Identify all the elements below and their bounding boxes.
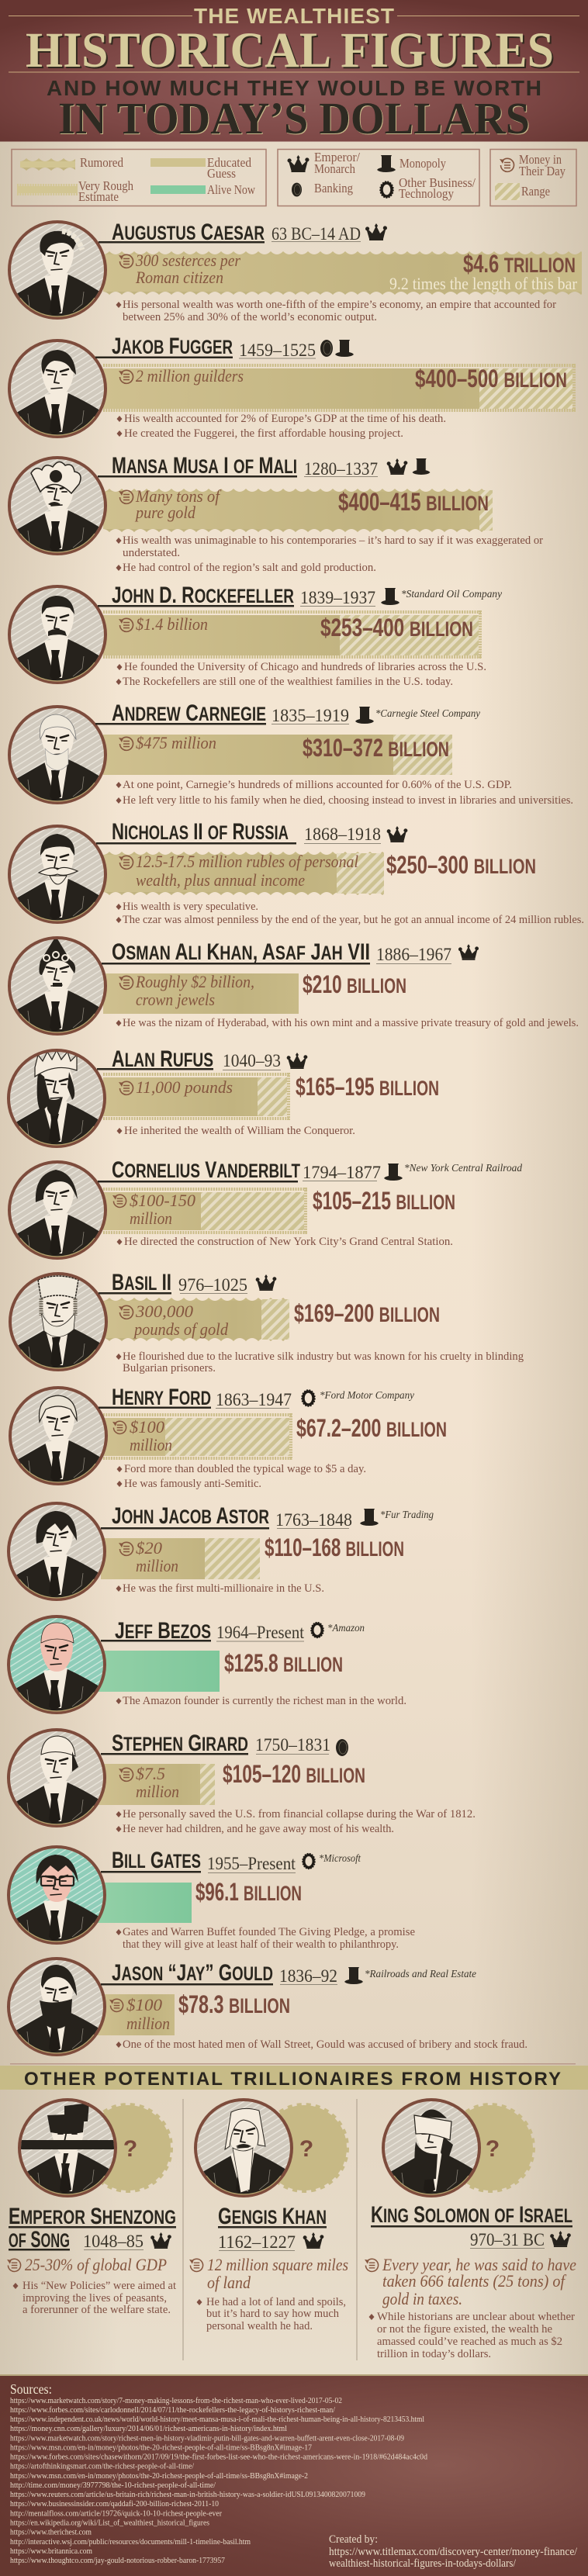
facts (116, 413, 446, 440)
entry: Augustus Caesar (9, 220, 582, 323)
wealth bar (101, 1538, 260, 1579)
icon: monopoly (355, 707, 374, 724)
portrait (9, 341, 105, 440)
facts (116, 901, 584, 926)
dates: 63 BC–14 AD (272, 224, 361, 244)
money then: taken 666 talents (25 tons) of (382, 2271, 567, 2291)
name: NICHOLAS II OF RUSSIA (112, 819, 289, 845)
icon: emperor crown (365, 223, 387, 240)
legend: wealth source icons: Banking (314, 181, 353, 195)
dates: 1048–85 (83, 2232, 144, 2251)
credits: Created by: (329, 2533, 378, 2546)
legend: wealth source icons: Technology (399, 186, 454, 201)
sources list: https://en.wikipedia.org/wiki/List_of_wealthiest_historical_figures (10, 2518, 209, 2527)
facts: While historians are unclear about whether (377, 2311, 575, 2323)
money then: million (130, 1208, 172, 1228)
facts: but it’s hard to say how much (206, 2308, 339, 2320)
icon: banking (336, 1739, 348, 1756)
money then: million (136, 1556, 178, 1575)
entry: Alan Rufus (9, 1046, 439, 1150)
dates: 1794–1877 (303, 1163, 381, 1182)
entry: Henry Ford (10, 1385, 447, 1490)
amount: $96.1 BILLION (195, 1878, 302, 1906)
wealth bar (103, 1413, 292, 1460)
sources list: https://www.reuters.com/article/us-britain-rich/richest-man-in-british-history-was-a-soldier-idUSL0913400820071009 (10, 2490, 365, 2499)
money then (112, 1191, 195, 1228)
money then: $100 (126, 1995, 162, 2014)
facts: His personal wealth was worth one-fifth of the empire’s economy, an empire that accounted for (123, 299, 556, 311)
dates: 1839–1937 (300, 588, 375, 607)
icons: crown and monopoly (387, 458, 430, 475)
unknown wealth seal: ? (123, 2136, 137, 2162)
portrait (9, 1616, 105, 1716)
amount: $67.2–200 BILLION (296, 1414, 447, 1442)
dates: 1955–Present (207, 1854, 296, 1873)
title line 3: AND HOW MUCH THEY WOULD BE WORTH (47, 76, 541, 100)
icon: crown (303, 2232, 323, 2249)
legend: estimate types (12, 149, 266, 206)
company note: *Microsoft (319, 1853, 361, 1865)
name: EMPEROR SHENZONG (9, 2204, 176, 2229)
facts (116, 1463, 366, 1490)
portrait (18, 2100, 117, 2199)
money then: Roughly $2 billion, (135, 972, 254, 991)
portrait (9, 1503, 105, 1603)
dates: 1750–1831 (255, 1735, 330, 1755)
wealth bar (97, 1994, 175, 2035)
legend: estimate types: Very Rough (78, 178, 133, 193)
amount: $78.3 BILLION (178, 1990, 290, 2018)
money then: $475 million (136, 733, 216, 752)
money then: crown jewels (136, 990, 215, 1009)
legend: estimate types: Rumored (80, 155, 123, 170)
company note: *New York Central Railroad (404, 1163, 523, 1174)
dates: 1836–92 (279, 1966, 337, 1986)
wealth bar (103, 1298, 289, 1341)
legend: estimate types: Educated (207, 155, 251, 170)
column dividers (183, 2099, 357, 2360)
unknown wealth seal: ? (299, 2136, 313, 2162)
panel: King Solomon of Israel (365, 2100, 576, 2360)
sources list: https://www.forbes.com/sites/carlodonnell/2014/07/11/the-rockefellers-the-legacy-of-historys-richest-man/ (10, 2405, 336, 2415)
dates: 1868–1918 (304, 825, 381, 844)
unknown wealth seal (261, 2105, 348, 2190)
facts (116, 1350, 524, 1374)
facts (116, 534, 543, 574)
legend: money and range (490, 149, 576, 206)
sources list: https://www.msn.com/en-in/money/photos/the-20-richest-people-of-all-time/ss-BBsg8nX#image-17 (10, 2443, 312, 2453)
icon: crown (287, 1053, 307, 1069)
entry: Cornelius Vanderbilt (9, 1157, 523, 1261)
money then (189, 2255, 348, 2292)
sources list: http://mentalfloss.com/article/19726/quick-10-10-richest-people-ever (10, 2509, 222, 2518)
portrait (9, 826, 105, 925)
legend: money and range: Range (521, 184, 550, 199)
wealth bar (103, 1073, 290, 1120)
section heading band: OTHER POTENTIAL TRILLIONAIRES FROM HISTORY (24, 2069, 561, 2090)
money then: $1.4 billion (136, 614, 208, 634)
icon: other business (302, 1390, 315, 1406)
facts: His wealth was unimaginable to his contemporaries – it’s hard to say if it was exaggerated or (123, 534, 543, 547)
amount: $250–300 BILLION (386, 851, 536, 879)
dates: 1763–1848 (275, 1510, 352, 1530)
sources list: https://www.msn.com/en-in/money/photos/the-20-richest-people-of-all-time/ss-BBsg8nX#image-2 (10, 2471, 308, 2481)
title line 2: HISTORICAL FIGURES (26, 22, 554, 78)
name: GENGIS KHAN (218, 2204, 327, 2229)
facts (369, 2311, 575, 2360)
entry: Nicholas II of Russia (9, 819, 584, 926)
portrait (9, 707, 105, 806)
facts: He flourished due to the lucrative silk industry but was known for his cruelty in blinding (123, 1350, 524, 1363)
money then: $20 (136, 1538, 162, 1558)
name: ALAN RUFUS (112, 1046, 213, 1072)
facts: Ford more than doubled the typical wage to $5 a day. (124, 1463, 366, 1475)
name: BASIL II (112, 1270, 171, 1295)
legend: estimate types: Estimate (78, 189, 119, 204)
facts: His wealth is very speculative. (123, 901, 258, 913)
title line 2: HISTORICAL FIGURES (27, 24, 555, 80)
name: STEPHEN GIRARD (112, 1731, 248, 1756)
sources list: https://www.thoughtco.com/jay-gould-notorious-robber-baron-1773957 (10, 2556, 225, 2565)
legend: wealth source icons (278, 149, 479, 206)
money then: million (136, 1782, 179, 1801)
portrait (9, 222, 105, 321)
wealth bar (103, 1188, 307, 1234)
money then: $7.5 (136, 1764, 165, 1783)
icon: monopoly (381, 588, 399, 605)
legend: wealth source icons: Emperor/ (314, 150, 360, 164)
icon: crown (256, 1274, 276, 1291)
portrait (9, 1847, 105, 1946)
facts: He created the Fuggerei, the first affordable housing project. (124, 427, 403, 440)
sources list: https://www.marketwatch.com/story/7-money-making-lessons-from-the-richest-man-who-ever-lived-2017-05-02 (10, 2396, 342, 2405)
money then: 12 million square miles (207, 2255, 348, 2274)
icon: crown (458, 944, 479, 960)
wealth bar (103, 610, 482, 659)
title line 4: IN TODAY’S DOLLARS (59, 94, 531, 144)
legend: wealth source icons: Other Business/ (399, 175, 476, 190)
company note: *Amazon (327, 1623, 365, 1634)
entry: Andrew Carnegie (9, 700, 573, 807)
facts: He was the first multi-millionaire in the U.S. (123, 1582, 324, 1595)
facts: The Amazon founder is currently the richest man in the world. (123, 1695, 406, 1707)
dates: 1964–Present (216, 1623, 305, 1642)
facts: or not the figure existed, the wealth he (377, 2323, 552, 2336)
facts: He inherited the wealth of William the Conqueror. (124, 1125, 355, 1137)
portrait (10, 1274, 106, 1373)
money then: of land (207, 2273, 251, 2292)
unknown wealth seal (447, 2105, 534, 2190)
portrait (9, 1050, 105, 1150)
sources list: https://www.forbes.com/sites/chasewithorn/2017/09/19/the-first-forbes-list-see-who-the-richest-americans-were-in-1918/#62d484ac4c0d (10, 2453, 427, 2462)
portrait (9, 458, 105, 557)
dates: 1886–1967 (376, 945, 451, 964)
portrait (10, 1388, 106, 1487)
dates: 1863–1947 (216, 1390, 292, 1409)
facts (116, 661, 486, 688)
panel: Emperor Shenzong of Song (7, 2100, 177, 2316)
icon: crown (550, 2231, 571, 2247)
sources list: Sources: (10, 2381, 52, 2397)
panel: Gengis Khan (189, 2100, 348, 2332)
company note: *Railroads and Real Estate (365, 1969, 476, 1980)
name: BILL GATES (112, 1848, 201, 1873)
dates: 1459–1525 (239, 341, 316, 360)
legend: money and range: Money in (519, 152, 562, 167)
legend: wealth source icons: Monopoly (399, 156, 446, 171)
facts: He never had children, and he gave away most of his wealth. (123, 1823, 394, 1835)
sources list: https://www.independent.co.uk/news/world/world-history/meet-mansa-musa-i-of-mali-the-richest-human-being-in-all-history-8213453.html (10, 2415, 424, 2424)
facts: understated. (123, 547, 180, 559)
entry: John D. Rockefeller (9, 583, 503, 688)
sources list: https://www.marketwatch.com/story/richest-men-in-history-vladimir-putin-bill-gates-and-warren-buffett-arent-even-close-2017-08-09 (10, 2434, 404, 2443)
name: HENRY FORD (112, 1385, 211, 1410)
facts: He founded the University of Chicago and hundreds of libraries across the U.S. (124, 661, 486, 673)
amount: $310–372 BILLION (303, 734, 449, 762)
name: JOHN D. ROCKEFELLER (112, 583, 294, 608)
money then: million (130, 1435, 172, 1454)
dates: 1835–1919 (272, 706, 349, 725)
legend: estimate types: Alive Now (207, 182, 256, 197)
facts: that they will give at least half of their wealth to philanthropy. (123, 1938, 399, 1951)
title line 4: IN TODAY’S DOLLARS (58, 93, 530, 143)
dates: 970–31 BC (470, 2230, 545, 2249)
facts: One of the most hated men of Wall Street, Gould was accused of bribery and stock fraud. (123, 2038, 527, 2051)
entry: Jason Jay Gould (9, 1959, 527, 2058)
name: OF SONG (9, 2227, 70, 2253)
facts: Gates and Warren Buffet founded The Giving Pledge, a promise (123, 1926, 415, 1938)
amount: $210 BILLION (303, 970, 406, 998)
wealth bar (97, 1883, 192, 1923)
facts: His wealth accounted for 2% of Europe’s GDP at the time of his death. (124, 413, 446, 425)
portrait (9, 1959, 105, 2058)
money then: 300 sesterces per (135, 251, 240, 270)
dates: 1162–1227 (218, 2232, 296, 2252)
entry: Jeff Bezos (9, 1616, 406, 1716)
sources list (10, 2381, 427, 2565)
amount: $253–400 BILLION (320, 614, 473, 641)
money then (109, 1995, 170, 2033)
sources list: https://www.therichest.com (10, 2527, 92, 2536)
name (9, 2204, 176, 2253)
money then (119, 1302, 229, 1339)
name: KING SOLOMON OF ISRAEL (371, 2202, 572, 2228)
facts (116, 779, 573, 807)
icon: monopoly (360, 1509, 379, 1526)
money then (119, 1538, 178, 1575)
money then (119, 251, 240, 287)
money then: 11,000 pounds (136, 1077, 233, 1097)
name: JOHN JACOB ASTOR (112, 1503, 269, 1529)
dates: 1280–1337 (304, 459, 378, 479)
wealth bar (97, 1651, 220, 1692)
facts (116, 1808, 476, 1835)
entry: Osman Ali Khan, Asaf Jah VII (9, 936, 579, 1037)
facts: His “New Policies” were aimed at (22, 2280, 177, 2292)
facts: between 25% and 30% of the world’s economic output. (123, 311, 377, 323)
money then (119, 1764, 179, 1801)
facts: He directed the construction of New York City’s Grand Central Station. (124, 1236, 453, 1248)
money then: $100-150 (130, 1191, 195, 1210)
legend: wealth source icons: Monarch (314, 161, 355, 176)
title line 1: THE WEALTHIEST (194, 4, 394, 28)
name: JAKOB FUGGER (112, 334, 233, 359)
entry: Bill Gates (9, 1847, 415, 1951)
money then: pure gold (134, 503, 196, 522)
facts: He had a lot of land and spoils, (206, 2296, 346, 2308)
icon: crown (387, 826, 407, 842)
money then: wealth, plus annual income (136, 870, 305, 890)
facts: He left very little to his family when he died, choosing instead to invest in libraries and universities. (123, 794, 573, 807)
dates: 976–1025 (178, 1275, 247, 1295)
company note: *Fur Trading (380, 1509, 434, 1521)
money then: gold in taxes. (382, 2289, 462, 2308)
facts (116, 1926, 415, 1951)
sources list: https://artofthinkingsmart.com/the-richest-people-of-all-time/ (10, 2462, 195, 2471)
money then (365, 2255, 576, 2308)
facts: improving the lives of peasants, (22, 2292, 167, 2305)
portrait (9, 1162, 105, 1261)
amount: $400–415 BILLION (338, 488, 489, 516)
sources list: https://www.businessinsider.com/qaddafi-200-billion-richest-2011-10 (10, 2499, 219, 2509)
wealth bar (103, 852, 384, 895)
entry: Jakob Fugger (9, 334, 576, 440)
icon: monopoly (344, 1967, 363, 1984)
portrait (9, 1730, 105, 1829)
facts: At one point, Carnegie’s hundreds of millions accounted for 0.60% of the U.S. GDP. (123, 779, 512, 791)
facts: amassed could’ve reached as much as $2 (377, 2336, 562, 2348)
portrait (9, 936, 105, 1037)
facts: trillion in today’s dollars. (377, 2348, 491, 2360)
name: CORNELIUS VANDERBILT (112, 1157, 300, 1183)
money then (119, 852, 358, 890)
facts: He had control of the region’s salt and gold production. (123, 562, 376, 574)
header banner (0, 0, 588, 144)
money then: $100 (130, 1417, 164, 1437)
money then: Many tons of (135, 486, 222, 506)
amount: $105–215 BILLION (313, 1187, 455, 1215)
name: OSMAN ALI KHAN, ASAF JAH VII (112, 939, 370, 965)
wealth bar (103, 735, 452, 775)
sources list: http://time.com/money/3977798/the-10-richest-people-of-all-time/ (10, 2481, 216, 2490)
facts: He personally saved the U.S. from financial collapse during the War of 1812. (123, 1808, 476, 1820)
unknown wealth seal: ? (486, 2136, 500, 2162)
facts: a forerunner of the welfare state. (22, 2304, 171, 2316)
wealth bar (97, 1764, 215, 1805)
portrait (383, 2100, 479, 2199)
icon: crown (150, 2232, 171, 2249)
legend: estimate types: Guess (207, 166, 236, 181)
entry: John Jacob Astor (9, 1503, 434, 1603)
company note: *Ford Motor Company (320, 1390, 415, 1402)
facts (116, 299, 556, 323)
facts: He was the nizam of Hyderabad, with his own mint and a massive private treasury of gold and jewels. (123, 1017, 579, 1029)
money then: pounds of gold (133, 1319, 229, 1339)
money then (119, 486, 222, 522)
name: AUGUSTUS CAESAR (112, 220, 265, 245)
amount: $169–200 BILLION (294, 1299, 440, 1327)
wealth bar (103, 489, 493, 532)
icon: monopoly (384, 1164, 403, 1181)
facts (12, 2280, 177, 2316)
facts: He was famously anti-Semitic. (124, 1478, 261, 1490)
wealth bar (103, 973, 299, 1014)
sources list: https://www.britannica.com (10, 2547, 92, 2556)
amount: $125.8 BILLION (224, 1649, 343, 1677)
icons: banking and monopoly (320, 340, 354, 357)
facts: Bulgarian prisoners. (123, 1362, 216, 1374)
money then (119, 972, 254, 1009)
money then: 300,000 (135, 1302, 193, 1321)
sources list: http://interactive.wsj.com/public/resources/documents/mill-1-timeline-basil.htm (10, 2537, 251, 2547)
money then: 2 million guilders (136, 366, 244, 386)
entry: Mansa Musa I of Mali (9, 453, 543, 574)
sources list: https://money.cnn.com/gallery/luxury/2014/06/01/richest-americans-in-history/index.html (10, 2424, 287, 2433)
icon: other business (311, 1623, 323, 1637)
legend: money and range: Their Day (519, 164, 566, 178)
name: JEFF BEZOS (115, 1618, 211, 1644)
amount: $400–500 BILLION (415, 365, 567, 392)
wealth bar (103, 251, 582, 295)
money then: 25-30% of global GDP (25, 2255, 167, 2274)
facts (197, 2296, 346, 2332)
money then: 12.5-17.5 million rubles of personal (136, 852, 358, 871)
portrait (195, 2100, 292, 2199)
name: ANDREW CARNEGIE (112, 700, 266, 726)
money then (112, 1417, 172, 1454)
company note: *Carnegie Steel Company (375, 708, 481, 720)
dates: 1040–93 (223, 1051, 281, 1070)
portrait (9, 586, 105, 686)
facts: The Rockefellers are still one of the wealthiest families in the U.S. today. (123, 676, 453, 688)
amount: $165–195 BILLION (296, 1073, 439, 1101)
entry: Stephen Girard (9, 1730, 476, 1835)
money then: million (126, 2014, 170, 2033)
company note: *Standard Oil Company (401, 589, 503, 600)
footer panel (0, 2374, 588, 2576)
amount: $110–168 BILLION (265, 1533, 404, 1561)
amount: $105–120 BILLION (223, 1760, 365, 1788)
money then: Roman citizen (135, 268, 223, 287)
entry: Basil II (10, 1270, 524, 1374)
credits: wealthiest-historical-figures-in-todays-dollars/ (329, 2557, 517, 2570)
facts: personal wealth he had. (206, 2320, 313, 2332)
name: MANSA MUSA I OF MALI (112, 453, 297, 479)
unknown wealth seal (85, 2105, 171, 2190)
wealth bar (103, 364, 576, 412)
credits (329, 2533, 578, 2570)
icon: other business (303, 1854, 315, 1869)
name: JASON “JAY” GOULD (112, 1960, 273, 1986)
